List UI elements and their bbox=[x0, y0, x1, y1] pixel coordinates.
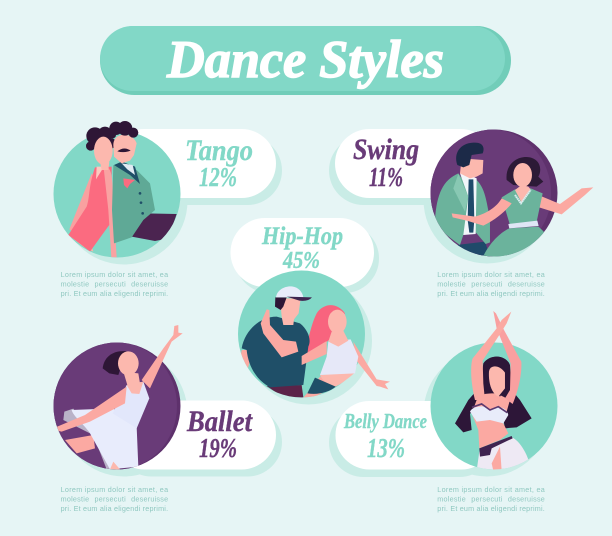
text block: belly dance bbox=[437, 485, 545, 513]
text block: tango bbox=[61, 270, 168, 298]
text block: belly dance: pri. Et eum alia eligendi reprimi. bbox=[437, 504, 545, 513]
panel: belly dance bbox=[329, 311, 558, 477]
illustration: ballerina bbox=[51, 325, 183, 470]
panel: tango bbox=[54, 121, 282, 264]
title banner bbox=[100, 26, 511, 95]
text block: belly dance: Lorem ipsum dolor sit amet, ea bbox=[437, 485, 545, 494]
label: hip-hop: Hip-Hop bbox=[261, 223, 343, 250]
text block: swing: pri. Et eum alia eligendi reprimi. bbox=[437, 289, 545, 298]
text block: swing: molestie persecuti deseruisse bbox=[437, 280, 545, 288]
value: tango 12%: 12% bbox=[199, 162, 237, 192]
value: ballet 19%: 19% bbox=[199, 433, 237, 463]
panel: swing bbox=[329, 129, 593, 264]
text block: swing bbox=[437, 270, 545, 298]
text block: swing: Lorem ipsum dolor sit amet, ea bbox=[437, 270, 545, 279]
value: hip-hop 45%: 45% bbox=[282, 248, 320, 274]
illustration: hip-hop couple bbox=[241, 286, 390, 398]
label: belly dance: Belly Dance bbox=[343, 409, 427, 433]
text block: ballet: pri. Et eum alia eligendi reprimi. bbox=[61, 504, 168, 513]
title: Dance Styles bbox=[166, 31, 444, 89]
illustration: swing couple bbox=[435, 143, 593, 260]
panel: hip-hop bbox=[230, 218, 390, 404]
label: swing: Swing bbox=[353, 133, 419, 166]
value: swing 11%: 11% bbox=[369, 162, 403, 192]
text block: ballet bbox=[61, 485, 168, 513]
illustration: belly dancer bbox=[455, 311, 532, 471]
value: belly dance 13%: 13% bbox=[367, 433, 405, 463]
text block: ballet: Lorem ipsum dolor sit amet, ea bbox=[61, 485, 168, 494]
illustration: tango couple bbox=[68, 121, 177, 257]
text block: tango: Lorem ipsum dolor sit amet, ea bbox=[61, 270, 168, 279]
panel: ballet bbox=[51, 325, 282, 476]
text block: belly dance: molestie persecuti deseruisse bbox=[437, 494, 545, 504]
text block: tango: pri. Et eum alia eligendi reprimi. bbox=[61, 289, 168, 298]
text block: tango: molestie persecuti deseruisse bbox=[61, 280, 168, 288]
label: ballet: Ballet bbox=[186, 405, 253, 438]
text block: ballet: molestie persecuti deseruisse bbox=[61, 494, 168, 504]
label: tango: Tango bbox=[185, 134, 253, 167]
